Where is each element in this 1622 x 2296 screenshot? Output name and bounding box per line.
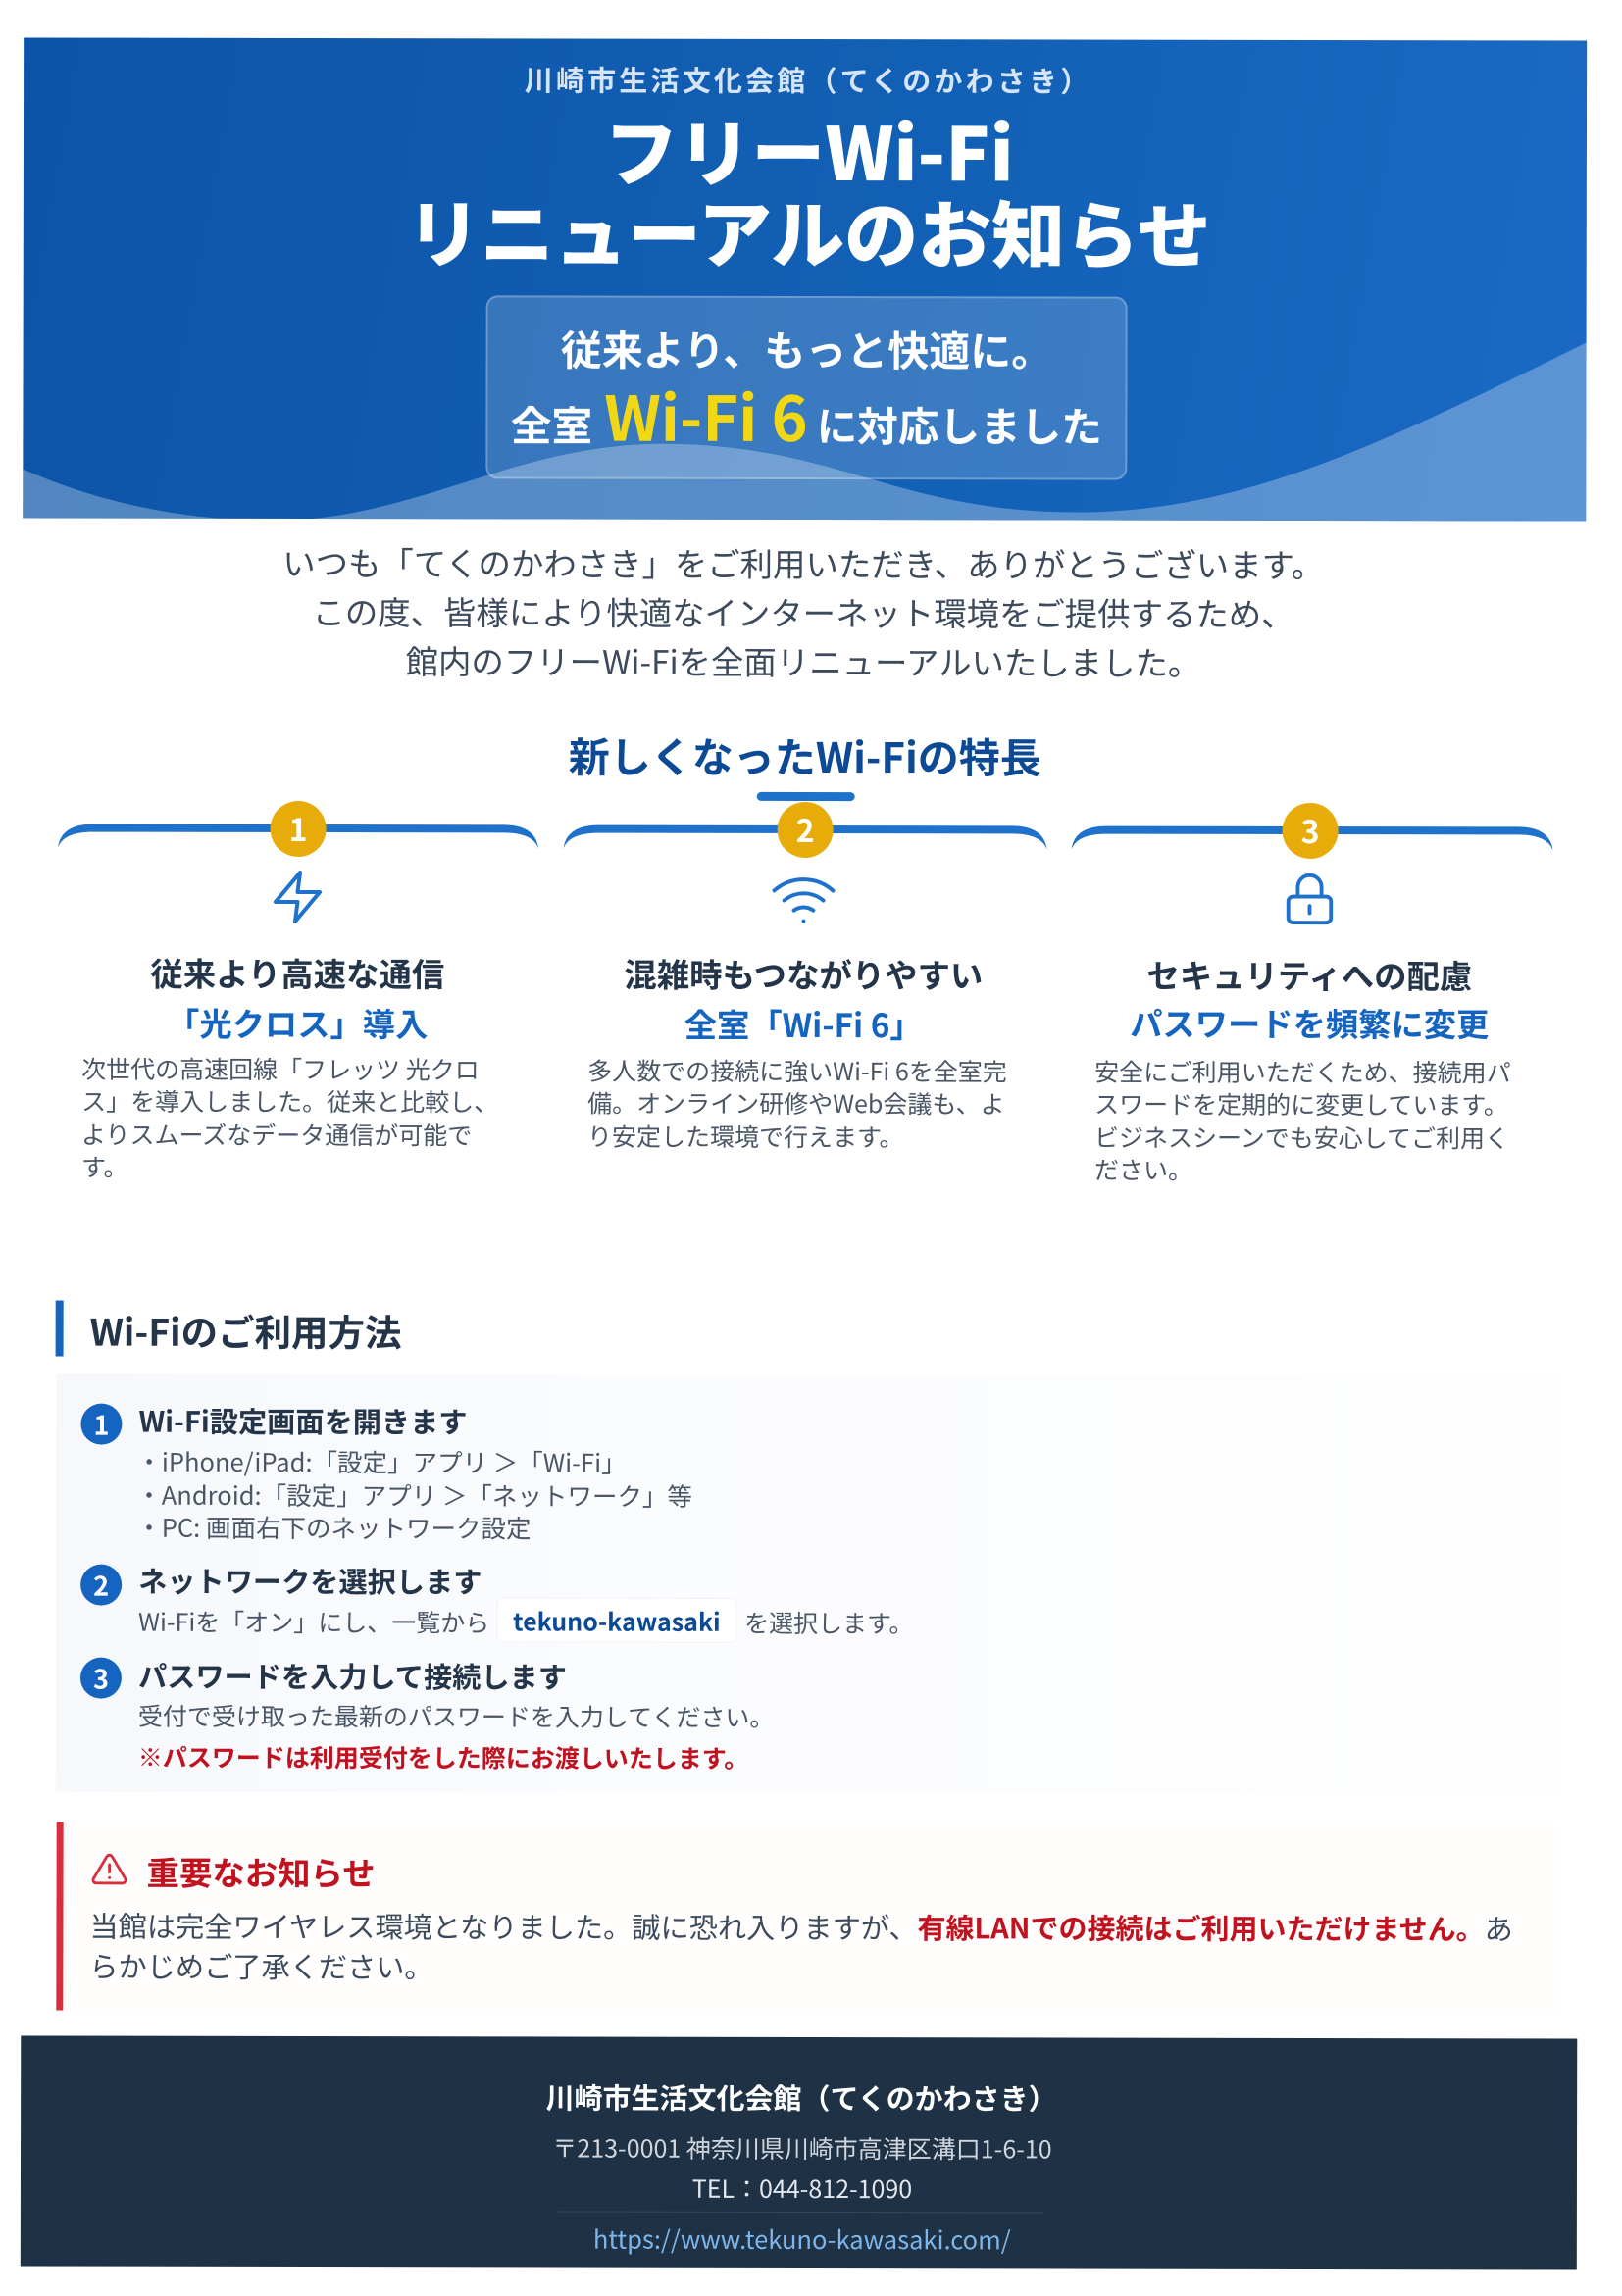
feature 3 <box>1071 803 1553 1187</box>
feature 3 subheading: パスワードを頻繁に変更 <box>1130 998 1489 1046</box>
feature 1 body: 次世代の高速回線「フレッツ 光クロ <box>81 1051 480 1086</box>
callout box <box>485 295 1128 480</box>
feature 1 subheading: 「光クロス」導入 <box>167 998 428 1046</box>
feature 2 body <box>587 1053 1007 1154</box>
title <box>407 95 1211 284</box>
features heading: 新しくなったWi-Fiの特長 <box>569 725 1041 785</box>
icon: warning triangle <box>92 1853 127 1884</box>
number badge 3: 3 <box>1301 808 1320 853</box>
step 2 badge <box>80 1565 122 1606</box>
feature 2 body: り安定した環境で行えます。 <box>587 1118 904 1154</box>
footer <box>21 2035 1577 2270</box>
step 2 badge: 2 <box>93 1566 109 1604</box>
intro text: いつも「てくのかわさき」をご利用いただき、ありがとうございます。 <box>282 537 1324 587</box>
intro text: この度、皆様により快適なインターネット環境をご提供するため、 <box>312 586 1294 636</box>
notice body <box>89 1905 1513 1986</box>
step 3 badge: 3 <box>93 1659 109 1697</box>
step 1 bullets <box>136 1443 692 1545</box>
step 1 bullets: ・Android:「設定」アプリ ＞「ネットワーク」等 <box>136 1475 692 1513</box>
feature 1 body: ス」を導入しました。従来と比較し、 <box>81 1083 498 1120</box>
callout line 2: 全室Wi-Fi 6に対応しました <box>511 371 1102 460</box>
step 1 title: Wi-Fi設定画面を開きます <box>138 1400 468 1441</box>
feature 2 <box>563 802 1047 1154</box>
feature 1 body: よりスムーズなデータ通信が可能で <box>81 1116 472 1152</box>
feature 2 heading: 混雑時もつながりやすい <box>624 949 983 997</box>
step 1 badge: 1 <box>93 1405 109 1443</box>
intro text: 館内のフリーWi-Fiを全面リニューアルいたしました。 <box>406 635 1200 685</box>
step 1 bullets: ・PC: 画面右下のネットワーク設定 <box>136 1509 532 1545</box>
feature 2 body: 備。オンライン研修やWeb会議も、よ <box>587 1085 1005 1122</box>
footer url: https://www.tekuno-kawasaki.com/ <box>593 2221 1011 2257</box>
number badge 2: 2 <box>796 807 815 852</box>
password note: ※パスワードは利用受付をした際にお渡しいたします。 <box>138 1739 748 1775</box>
step 2 title: ネットワークを選択します <box>138 1560 482 1601</box>
header banner <box>23 37 1587 522</box>
feature 3 body: 安全にご利用いただくため、接続用パ <box>1094 1054 1511 1089</box>
usage heading text: Wi-Fiのご利用方法 <box>90 1303 402 1357</box>
heading underline <box>757 792 855 801</box>
step 1 bullets: ・iPhone/iPad:「設定」アプリ ＞「Wi-Fi」 <box>136 1443 627 1480</box>
intro text <box>282 537 1324 685</box>
step 2 text end: を選択します。 <box>744 1605 914 1640</box>
feature 3 body: ださい。 <box>1094 1152 1192 1187</box>
footer phone: TEL：044-812-1090 <box>692 2171 912 2206</box>
feature 1 body <box>81 1051 498 1184</box>
step 1 badge <box>80 1404 122 1445</box>
feature 1 body: す。 <box>81 1149 128 1184</box>
footer address: 〒213-0001 神奈川県川崎市高津区溝口1-6-10 <box>552 2129 1052 2166</box>
feature 3 heading: セキュリティへの配慮 <box>1146 950 1472 998</box>
footer venue name: 川崎市生活文化会館（てくのかわさき） <box>546 2075 1057 2118</box>
step 3 badge <box>80 1658 122 1699</box>
callout line 1: 従来より、もっと快適に。 <box>561 319 1052 378</box>
notice body: 当館は完全ワイヤレス環境となりました。誠に恐れ入りますが、有線LANでの接続はご利用いただけません。あ <box>89 1905 1513 1948</box>
panel: usage steps <box>56 1374 1559 1794</box>
feature 1 heading: 従来より高速な通信 <box>150 948 444 996</box>
step 3 title: パスワードを入力して接続します <box>138 1655 567 1697</box>
feature 3 body: ビジネスシーンでも安心してご利用く <box>1094 1119 1509 1155</box>
feature 2 subheading: 全室「Wi-Fi 6」 <box>684 999 923 1047</box>
network name: tekuno-kawasaki <box>513 1603 721 1639</box>
usage section heading <box>56 1301 448 1357</box>
venue name: 川崎市生活文化会館（てくのかわさき） <box>525 58 1091 101</box>
number badge 1: 1 <box>289 806 308 851</box>
number badge 2 <box>778 802 834 858</box>
step 3 text: 受付で受け取った最新のパスワードを入力してください。 <box>138 1698 774 1734</box>
number badge 3 <box>1283 803 1339 859</box>
step 2 text: Wi-Fiを「オン」にし、一覧から <box>138 1604 489 1639</box>
notice title: 重要なお知らせ <box>147 1847 376 1895</box>
feature 1 <box>58 801 539 1184</box>
feature 3 body: スワードを定期的に変更しています。 <box>1094 1086 1508 1123</box>
feature 2 body: 多人数での接続に強いWi-Fi 6を全室完 <box>587 1053 1007 1088</box>
feature 3 body <box>1094 1054 1511 1187</box>
title: フリーWi-Fi <box>604 95 1014 202</box>
network name pill <box>497 1597 736 1643</box>
notice body: らかじめご了承ください。 <box>89 1945 433 1986</box>
icon: lightning bolt <box>273 871 322 923</box>
title: リニューアルのお知らせ <box>407 175 1211 284</box>
icon: lock <box>1287 873 1334 925</box>
number badge 1 <box>271 801 327 857</box>
panel: important notice <box>56 1822 1558 2013</box>
wave background <box>24 343 1587 522</box>
icon: wifi <box>772 877 836 923</box>
